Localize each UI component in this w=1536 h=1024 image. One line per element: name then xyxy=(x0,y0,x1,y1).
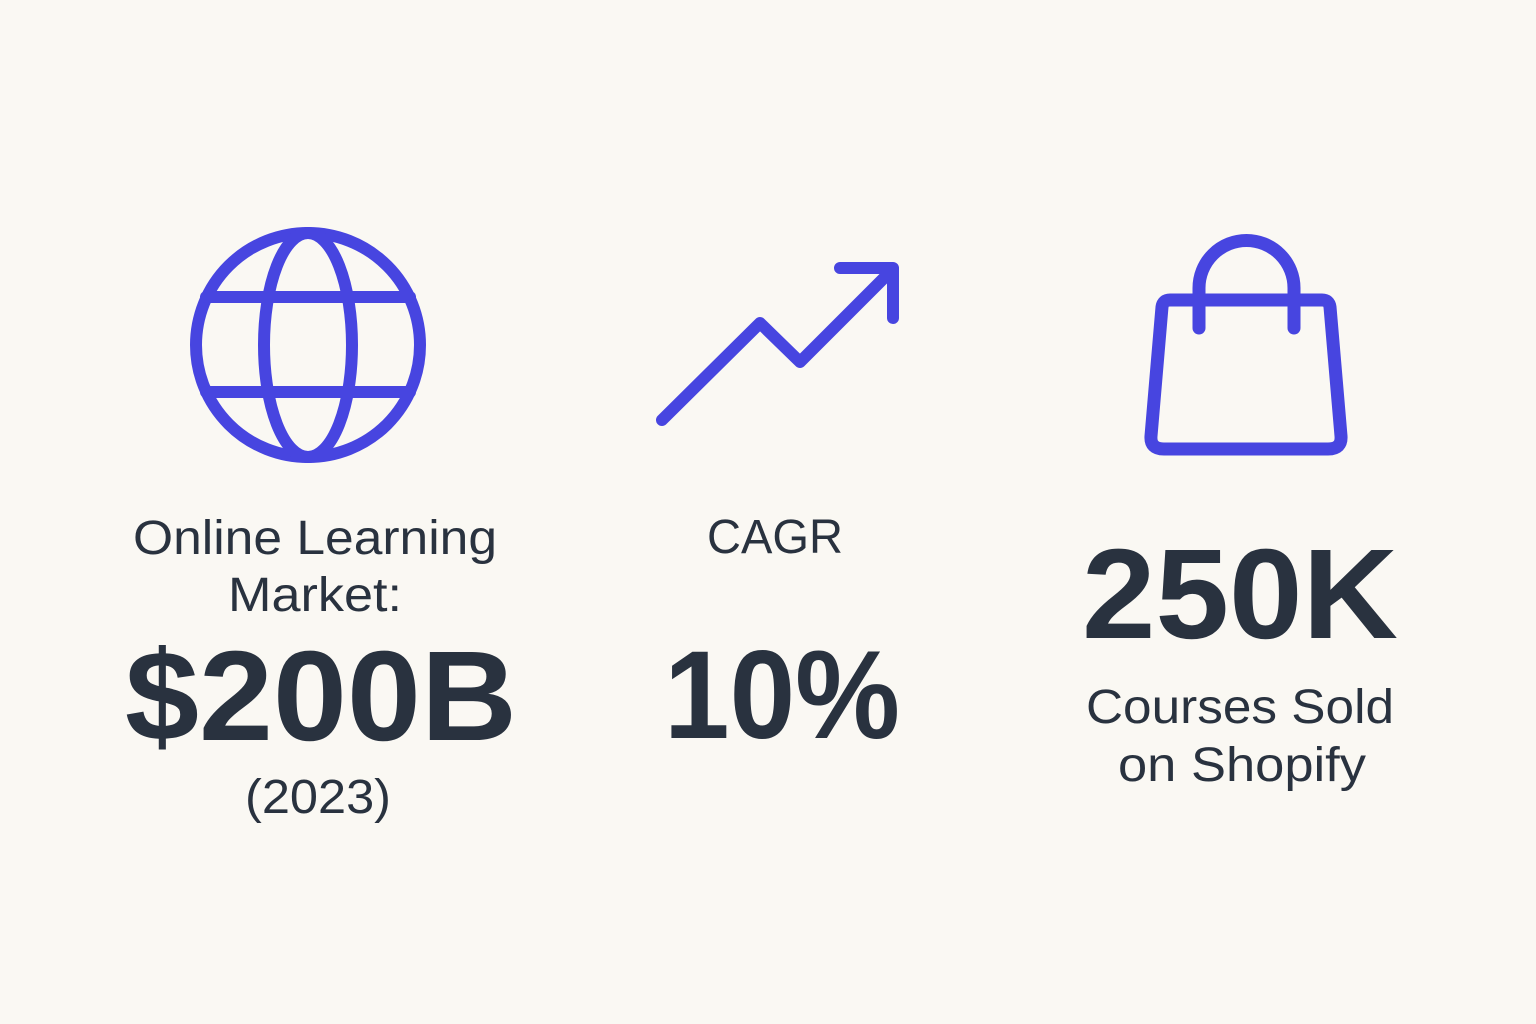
text: 250K value: 250K xyxy=(1082,523,1398,666)
text: $200B value: $200B xyxy=(125,625,517,768)
text: market label: Market: xyxy=(228,569,402,622)
text: 10% value: 10% xyxy=(664,626,900,765)
icon: globe xyxy=(196,233,420,457)
icon: trend arrow xyxy=(662,268,893,420)
icon: shopping bag xyxy=(1151,240,1341,449)
text: courses label: on Shopify xyxy=(1118,739,1366,792)
text: courses label: Courses Sold xyxy=(1086,681,1394,734)
text: courses label xyxy=(1086,681,1394,792)
text: market label: Online Learning xyxy=(133,512,497,565)
text: year: (2023) xyxy=(245,771,391,824)
text: market label xyxy=(133,512,497,622)
text: CAGR label: CAGR xyxy=(707,511,843,564)
